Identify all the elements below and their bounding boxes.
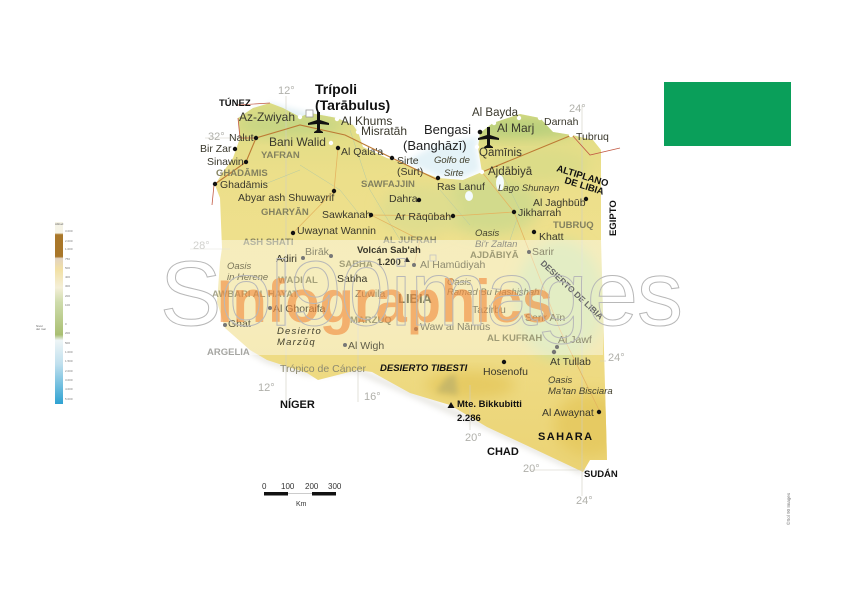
labels inside the band: Marzūq <box>277 337 316 348</box>
italic geographic labels <box>380 155 613 397</box>
cities: Al Marj <box>497 121 534 135</box>
labels inside the band: Zuwila <box>355 288 386 300</box>
italic geographic labels: Oasis <box>548 375 573 386</box>
cities: Khatt <box>539 231 564 243</box>
flag of Libya <box>664 82 791 146</box>
elevation legend: 2.000 <box>65 239 73 243</box>
labels inside the band: Tazirbu <box>472 304 506 316</box>
labels inside the band: in Herene <box>227 272 268 283</box>
labels inside the band: AL KUFRAH <box>487 333 542 344</box>
mountain: Mte. Bikkubitti: 2.286 <box>457 413 481 424</box>
elevation legend: 400 <box>65 275 70 279</box>
regions: GHADĀMIS <box>216 168 268 179</box>
latitude and longitude labels: 12° <box>258 382 275 394</box>
elevation legend: 1.000 <box>65 247 73 251</box>
italic geographic labels: DESIERTO TIBESTI <box>380 363 468 374</box>
scale bar: Km <box>296 501 307 508</box>
elevation legend: 2.000 <box>65 369 73 373</box>
neighbouring countries: NÍGER <box>280 398 315 411</box>
cities: Sinawin <box>207 156 244 168</box>
icon: airplane Bengasi <box>478 127 499 148</box>
highland label: Altiplano de Libia: DE LIBIA <box>563 175 605 198</box>
elevation legend: 1.000 <box>65 350 73 354</box>
cities: Ras Lanuf <box>437 181 485 193</box>
labels inside the band: Volcán Sab'ah <box>357 245 421 256</box>
cities: Ghadāmis <box>220 179 268 191</box>
regions: GHARYĀN <box>261 207 309 218</box>
capital: Tripoli <box>315 81 390 113</box>
city: Bengasi: (Banghāzī) <box>403 138 467 153</box>
watermark: orange text: Infographics <box>217 268 553 335</box>
cities: Al Jaghbūb <box>533 197 586 209</box>
latitude and longitude labels: 24° <box>569 103 586 115</box>
regions: YAFRAN <box>261 150 300 161</box>
elevation legend: 3.000 <box>65 378 73 382</box>
neighbouring countries: TÚNEZ <box>219 97 251 109</box>
labels inside the band: Al Ghoraifa <box>273 303 326 315</box>
cities: Darnah <box>544 116 579 128</box>
mountain: Mte. Bikkubitti <box>448 399 522 424</box>
elevation legend: 5.000 <box>65 397 73 401</box>
regions: TUBRUQ <box>553 220 594 231</box>
elevation legend: 500 <box>65 266 70 270</box>
neighbouring countries: ARGELIA <box>207 347 250 358</box>
labels inside the band <box>212 245 605 375</box>
elevation legend: 500 <box>65 341 70 345</box>
neighbouring countries: SUDÁN <box>584 469 618 480</box>
elevation legend: 200 <box>65 294 70 298</box>
cities: Al Bayda <box>472 107 519 119</box>
scale bar: 0 <box>262 482 267 491</box>
capital: Tripoli: (Tarābulus) <box>315 97 390 113</box>
cities: Al Qala'a <box>341 146 383 158</box>
city: Bengasi <box>403 122 482 153</box>
elevation legend: 300 <box>65 284 70 288</box>
cities: Abyar ash Shuwayrif <box>238 192 334 204</box>
labels inside the band: Sarir <box>532 246 555 258</box>
credit: ©Sol 90 Images <box>785 492 791 525</box>
main roads and borders <box>212 103 620 205</box>
labels inside the band: Al Wigh <box>348 340 384 352</box>
cities: Nalut <box>229 132 254 144</box>
city markers <box>213 115 601 414</box>
mountain: Mte. Bikkubitti: Mte. Bikkubitti <box>457 399 522 410</box>
cities: Sawkanah <box>322 209 371 221</box>
lakes and oases <box>465 175 504 201</box>
elevation legend: 200 <box>65 331 70 335</box>
translucent band over map <box>160 240 603 355</box>
labels inside the band: AWBARI AL HAYAT <box>212 289 298 300</box>
labels inside the band: Al Jawf <box>558 334 592 346</box>
neighbouring countries: EGIPTO <box>608 200 619 236</box>
sea and coastal shadow <box>238 103 583 472</box>
cities <box>200 107 609 419</box>
labels inside the band: Oasis <box>227 261 252 272</box>
latitude and longitude labels: 12° <box>278 85 295 97</box>
regions: ASH SHATI <box>243 237 294 248</box>
elevation legend: 0 <box>65 322 67 326</box>
elevation legend: del mar <box>36 327 46 331</box>
labels inside the band: Ghat <box>228 318 251 330</box>
regions <box>216 150 594 248</box>
labels inside the band: AJDĀBIYĀ <box>470 250 519 261</box>
elevation legend: Altitud <box>55 222 64 226</box>
latitude and longitude labels: 20° <box>465 432 482 444</box>
latitude and longitude labels: 32° <box>208 131 225 143</box>
labels inside the band: WADI AL <box>278 275 318 286</box>
cities: Bir Zar <box>200 143 232 155</box>
elevation legend: 3.000 <box>65 229 73 233</box>
latitude and longitude labels: 24° <box>608 352 625 364</box>
elevation legend: 4.000 <box>65 387 73 391</box>
latitude and longitude labels: 16° <box>364 391 381 403</box>
elevation legend: 750 <box>65 257 70 261</box>
labels inside the band: Waw al Nāmūs <box>420 321 490 333</box>
rivers, wadis and graticule <box>190 96 606 496</box>
labels inside the band: DESIERTO DE LIBIA <box>539 258 605 321</box>
cities: Hosenofu <box>483 366 528 378</box>
cities: Az-Zwiyah <box>239 110 295 124</box>
cities: Tubruq <box>576 131 609 143</box>
labels inside the band: Adiri <box>276 253 297 265</box>
italic geographic labels: Sirte <box>444 168 464 179</box>
Sahara label: SAHARA <box>538 431 593 443</box>
cities: Ar Rāqūbah <box>395 211 451 223</box>
elevation legend: 100 <box>65 303 70 307</box>
elevation legend: Nivel <box>36 324 43 328</box>
labels inside the band: Ramad Bu Hashishah <box>447 287 539 298</box>
labels inside the band: Oasis <box>447 277 472 288</box>
labels inside the band: 1.200 <box>377 257 401 268</box>
map: Libya land area <box>215 103 626 472</box>
neighbouring countries: CHAD <box>487 446 519 458</box>
cities: At Tullab <box>550 356 591 368</box>
cities: Uwaynat Wannin <box>297 225 376 237</box>
cities: Al Khums <box>341 114 392 128</box>
labels inside the band: Al Hamūdiyah <box>420 259 486 271</box>
cities: Bani Walid <box>269 135 326 149</box>
regions: SAWFAJJIN <box>361 179 415 190</box>
latitude and longitude labels: 20° <box>523 463 540 475</box>
capital: Tripoli: Trípoli <box>315 81 357 97</box>
italic geographic labels: Lago Shunayn <box>498 183 559 194</box>
cities: Ajdābiyā <box>488 166 533 178</box>
scale bar: 100 <box>281 482 295 491</box>
cities: Sirte <box>397 155 419 167</box>
labels inside the band: LIBIA <box>398 291 433 306</box>
labels inside the band: Serir Aïn <box>525 312 565 324</box>
airport squares <box>306 110 436 261</box>
labels inside the band: MARZUQ <box>350 315 392 326</box>
scale bar: 200 <box>305 482 319 491</box>
watermark: outlined grey text: Sol90images <box>160 243 683 345</box>
elevation legend: 1.500 <box>65 359 73 363</box>
cities: Dahra <box>389 193 418 205</box>
elevation legend <box>36 222 73 404</box>
labels inside the band: SABHA <box>339 259 373 270</box>
latitude and longitude labels <box>193 85 625 507</box>
italic geographic labels: Bi'r Zaltan <box>475 239 517 250</box>
scale bar: 300 <box>328 482 342 491</box>
cities: Misratāh <box>361 124 407 138</box>
scale bar <box>262 482 342 508</box>
cities: Jikharrah <box>518 207 561 219</box>
cities: (Surt) <box>397 166 423 178</box>
cities: Al Awaynat <box>542 407 594 419</box>
italic geographic labels: Ma'tan Bisciara <box>548 386 613 397</box>
icon: airplane Tripoli <box>308 112 329 133</box>
cities: Qamīnis <box>479 147 522 159</box>
latitude and longitude labels: 28° <box>193 240 210 252</box>
latitude and longitude labels: 24° <box>576 495 593 507</box>
neighbouring countries <box>207 97 619 480</box>
city: Bengasi: Bengasi <box>424 122 471 137</box>
italic geographic labels: Oasis <box>475 228 500 239</box>
labels inside the band: Birāk <box>305 246 330 258</box>
italic geographic labels: Golfo de <box>434 155 470 166</box>
labels inside the band: Sabha <box>337 273 368 285</box>
regions: AL JUFRAH <box>383 235 437 246</box>
labels inside the band: Desierto <box>277 326 322 337</box>
highland label: Altiplano de Libia: ALTIPLANO <box>555 163 610 190</box>
labels inside the band: Trópico de Cáncer <box>280 363 366 375</box>
